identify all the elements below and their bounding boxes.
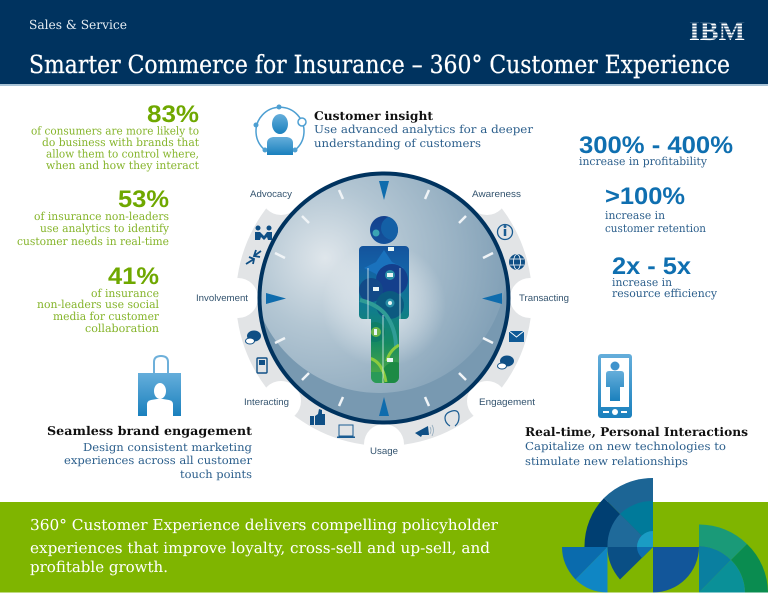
header band (0, 0, 768, 86)
stat: 53%: of insurance non-leaders (34, 210, 169, 223)
stat: >100%: >100% (605, 183, 685, 210)
icon: thumbs up (310, 409, 325, 425)
stat: 83%: do business with brands that (42, 136, 200, 149)
icon: customer insight (254, 104, 306, 155)
stat: 83%: allow them to control where, (46, 148, 199, 160)
real-time text (525, 425, 748, 468)
IBM logo: IBM (689, 16, 745, 46)
real-time text: Real-time, Personal Interactions (525, 425, 748, 439)
ring labels: Interacting (244, 397, 289, 408)
stat: 53%: customer needs in real-time (17, 235, 169, 248)
footer text (30, 516, 499, 576)
icon: chat left (246, 330, 261, 344)
stat: 83%: when and how they interact (46, 159, 200, 172)
central figure (359, 216, 409, 383)
brand engagement text: touch points (180, 468, 252, 481)
icon: info (498, 224, 512, 240)
stat: 83%: of consumers are more likely to (31, 124, 199, 138)
stat: 41%: 41% (108, 263, 159, 290)
stat: 83%: 83% (147, 101, 199, 128)
customer insight text: Use advanced analytics for a deeper (314, 123, 534, 136)
stat: 2x-5x: resource efficiency (612, 287, 718, 300)
ring labels: Usage (370, 446, 398, 457)
stat: 53% (17, 186, 170, 248)
stat: 2x-5x (612, 253, 718, 300)
icon: smartphone (598, 354, 632, 418)
dial sphere (258, 172, 510, 424)
ring labels: Involvement (196, 293, 248, 304)
stat: >100%: increase in (605, 209, 665, 222)
footer text: profitable growth. (30, 558, 168, 576)
stat: 83% (31, 101, 200, 172)
stat: 41%: of insurance (91, 287, 159, 300)
section label: Sales & Service (29, 17, 127, 32)
customer insight text (314, 109, 534, 150)
stat: 2x-5x: 2x - 5x (612, 253, 692, 280)
footer graphic (562, 478, 768, 592)
brand engagement text (47, 424, 253, 481)
icon: shopping bag (138, 356, 181, 416)
real-time text: stimulate new relationships (525, 455, 688, 468)
icon: headset (445, 411, 459, 426)
icon: laptop (337, 425, 355, 438)
brand engagement text: Seamless brand engagement (47, 424, 252, 438)
stat: 53%: 53% (118, 186, 169, 213)
real-time text: Capitalize on new technologies to (525, 440, 726, 453)
icon: chat right (498, 356, 514, 369)
stat: 300-400%: increase in profitability (579, 155, 708, 168)
stat: 53%: use analytics to identify (40, 222, 170, 235)
ring labels: Advocacy (250, 189, 292, 200)
brand engagement text: Design consistent marketing (83, 441, 252, 454)
ring labels: Engagement (479, 397, 535, 408)
customer insight text: understanding of customers (314, 137, 481, 150)
icon: arrows (246, 250, 261, 264)
stat: 41%: collaboration (85, 322, 159, 335)
ring labels: Awareness (472, 189, 521, 200)
footer band (0, 502, 768, 592)
gear ring (218, 140, 550, 464)
ring labels (196, 189, 569, 457)
stat: >100% (605, 183, 706, 235)
icon: mobile (257, 358, 267, 373)
footer text: experiences that improve loyalty, cross-sell and up-sell, and (30, 539, 490, 557)
icon: envelope (509, 331, 524, 342)
icon: people (255, 226, 272, 240)
footer text: 360° Customer Experience delivers compelling policyholder (30, 516, 499, 534)
customer insight text: Customer insight (314, 109, 433, 123)
brand engagement text: experiences across all customer (64, 454, 253, 467)
stat: 2x-5x: increase in (612, 276, 672, 289)
stat: 41%: non-leaders use social (37, 298, 159, 311)
ring labels: Transacting (519, 293, 569, 304)
dial pointers (266, 181, 502, 416)
icon: megaphone (415, 425, 434, 437)
icon: globe (509, 254, 525, 270)
dial ticks (275, 190, 493, 406)
stat: >100%: customer retention (605, 222, 706, 235)
stat: 41% (37, 263, 160, 335)
stat: 41%: media for customer (53, 310, 160, 323)
stat: 300-400%: 300% - 400% (579, 132, 733, 159)
